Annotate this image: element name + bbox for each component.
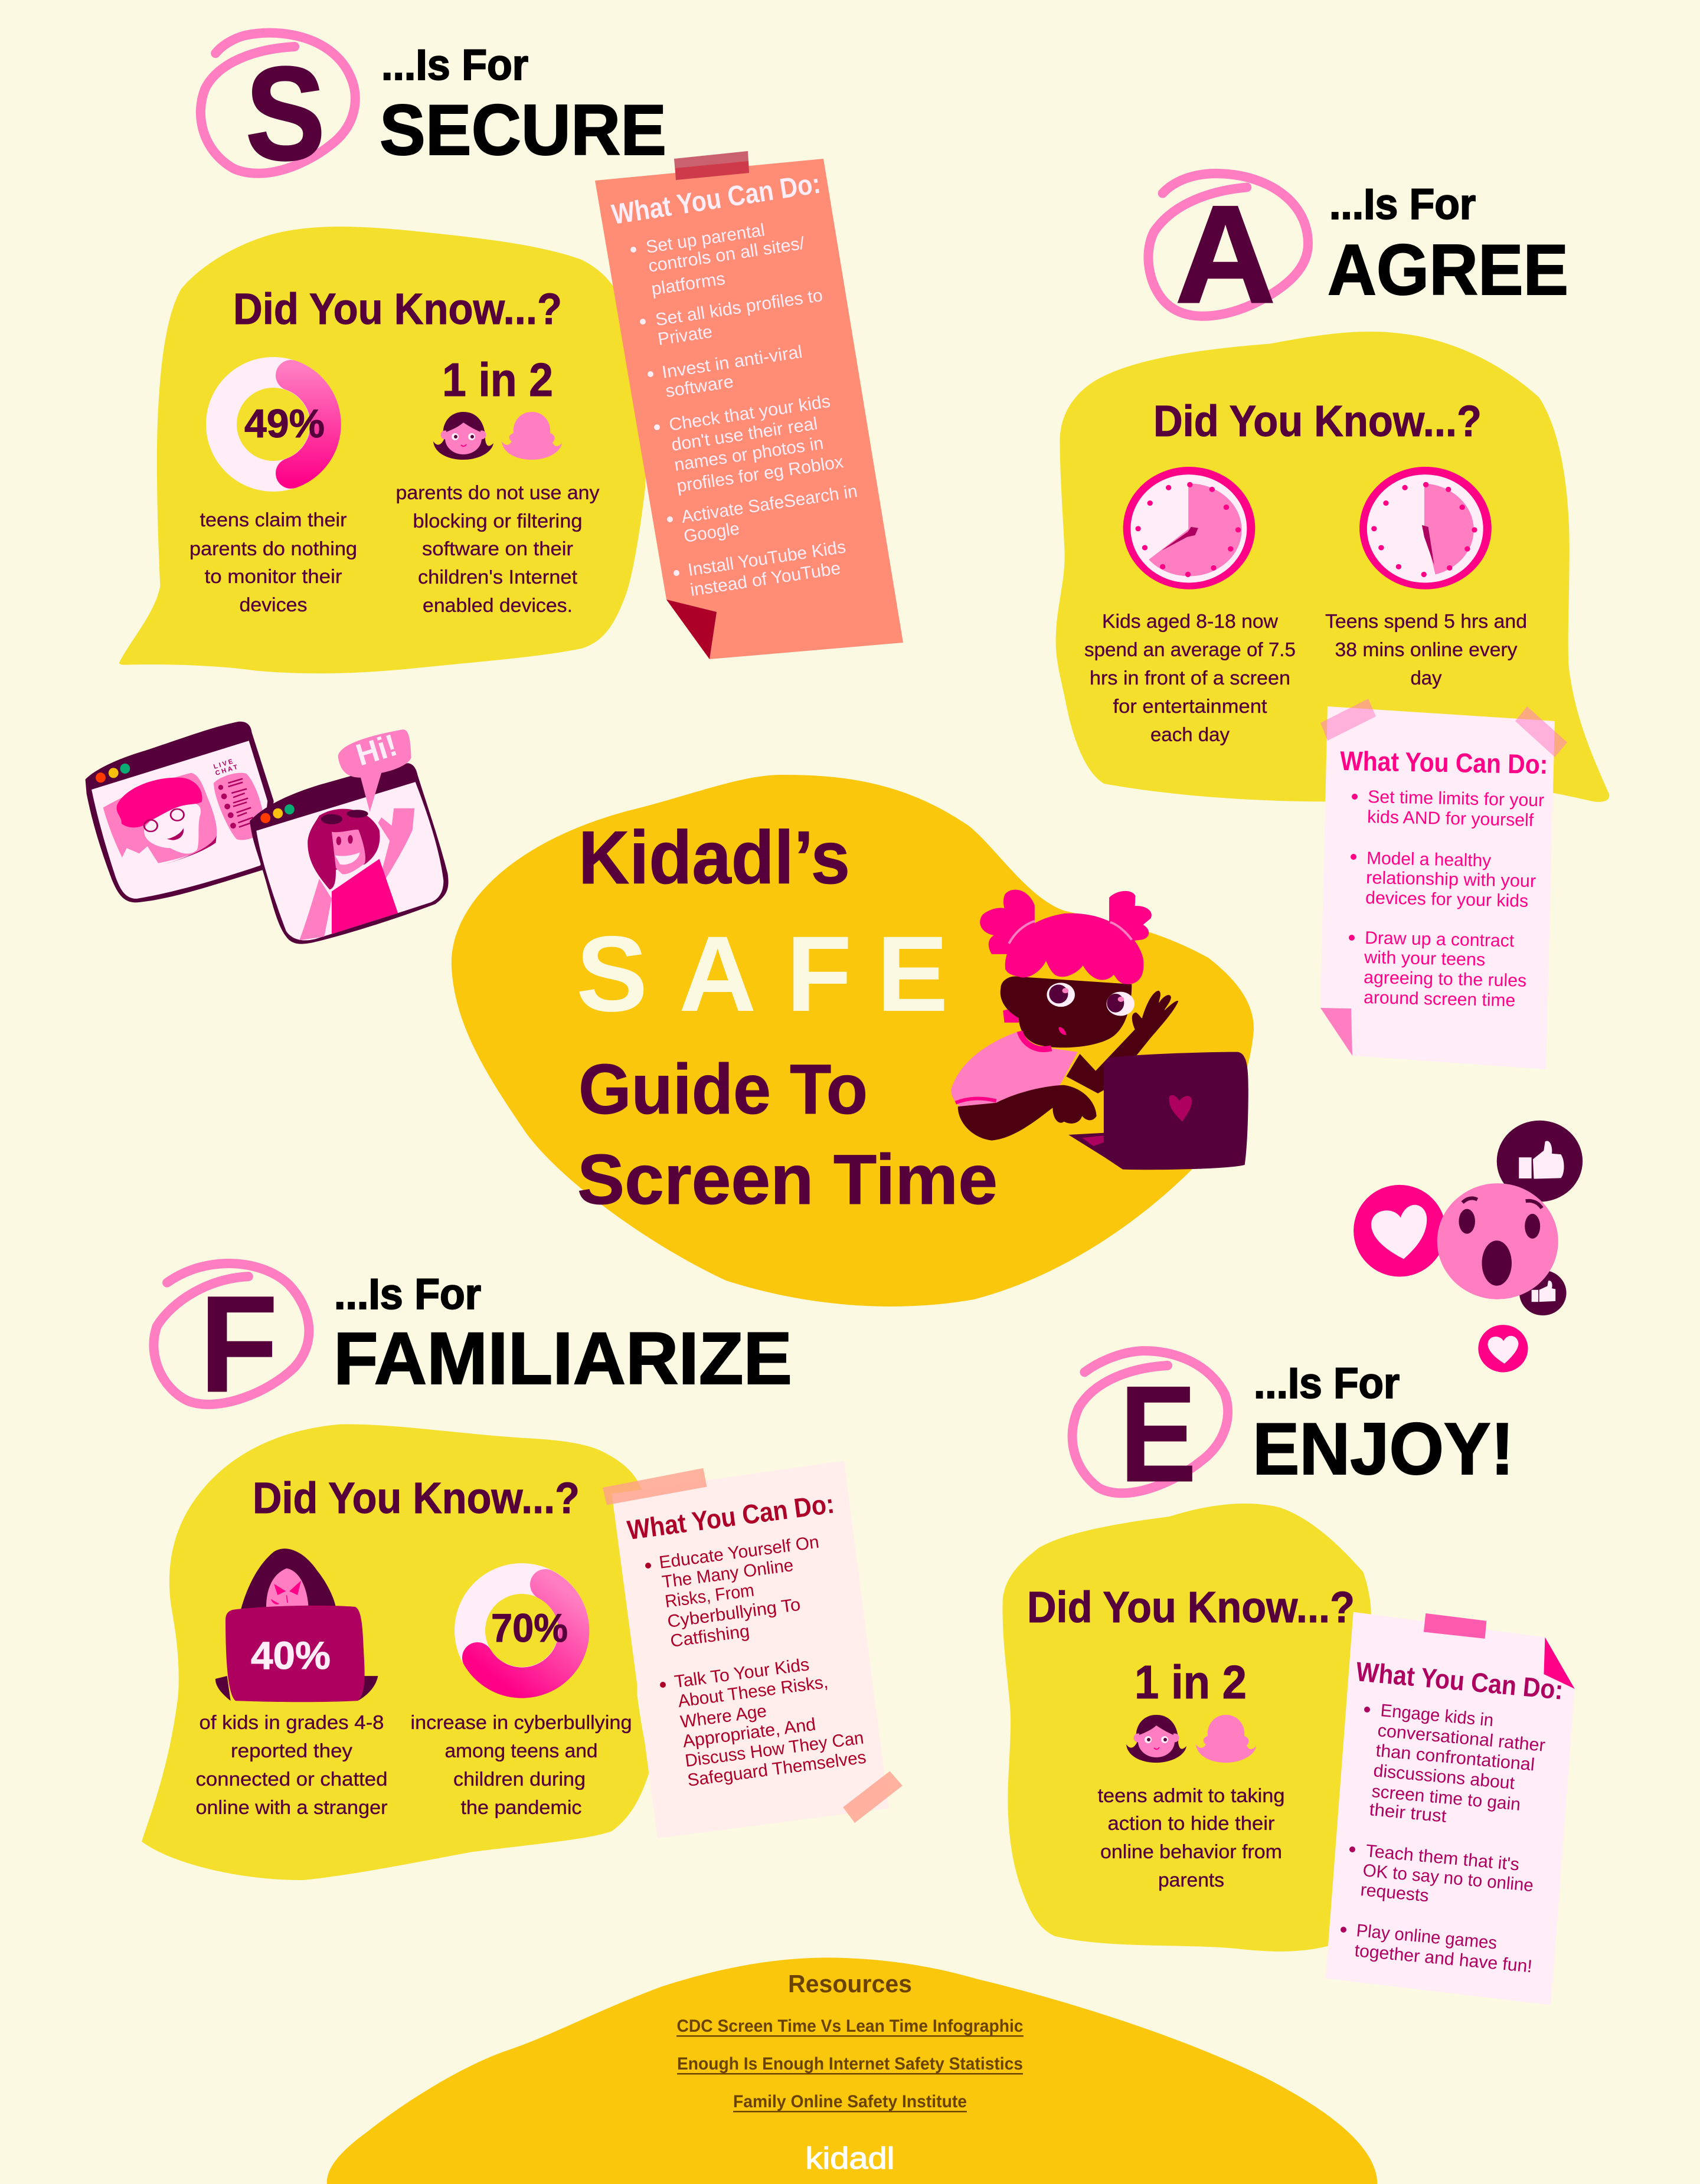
1 in 2 description: blocking or filtering	[413, 510, 582, 532]
note: what you can do (enjoy): screen time to gain	[1371, 1782, 1521, 1815]
did you know heading: Did You Know...?	[1153, 397, 1482, 446]
F heading large: FAMILIARIZE	[334, 1318, 792, 1400]
title blob with title	[0, 775, 1254, 1307]
note: what you can do (secure): names or photos in	[673, 434, 825, 475]
icon: hooded stranger with laptop	[215, 1548, 378, 1702]
note: what you can do (agree)	[1320, 699, 1567, 1069]
note: what you can do (agree): Set time limits for your	[1368, 787, 1544, 810]
1 in 2 description: software on their	[422, 538, 573, 559]
section: E is for Enjoy	[1002, 1351, 1575, 2005]
note: what you can do (secure): don't use their real	[670, 414, 819, 455]
note: what you can do (agree): agreeing to the rules	[1364, 968, 1526, 991]
clock 2 description: Teens spend 5 hrs and	[1325, 610, 1527, 632]
note: what you can do (secure): controls on all sites/	[647, 234, 806, 276]
icons: two faces	[1126, 1715, 1256, 1763]
note: what you can do (secure): profiles for eg Roblox	[675, 452, 845, 496]
note: what you can do (familiarize): Educate Yourself On	[658, 1533, 820, 1573]
S letter badge	[201, 33, 355, 188]
E letter badge	[1073, 1351, 1228, 1511]
note: what you can do (secure): Set up parental	[645, 220, 766, 257]
note: what you can do (agree): with your teens	[1364, 948, 1485, 970]
1 in 2 stat: 1 in 2	[442, 353, 553, 406]
illustration: reaction icons	[1354, 1121, 1583, 1372]
note: what you can do (enjoy): Teach them that it's	[1365, 1841, 1520, 1875]
F speech bubble	[142, 1424, 649, 1880]
donut chart 49%	[221, 372, 326, 476]
illustration: video chat windows	[86, 722, 449, 944]
49% description: to monitor their	[204, 565, 342, 587]
resource link 1: CDC Screen Time Vs Lean Time Infographic	[676, 2016, 1024, 2036]
E heading small: ...Is For	[1254, 1360, 1400, 1407]
live chat label: LIVE	[212, 758, 236, 771]
note: what you can do (secure): Install YouTube Kids	[686, 537, 847, 580]
note: what you can do (enjoy): discussions about	[1372, 1761, 1516, 1793]
donut chart 49%: 49%	[244, 401, 325, 446]
clock 2 description: 38 mins online every	[1335, 638, 1518, 660]
note: what you can do (familiarize): Talk To Your Kids	[674, 1655, 810, 1692]
note: what you can do (enjoy)	[1326, 1612, 1575, 2005]
note: what you can do (enjoy): their trust	[1368, 1800, 1448, 1826]
A heading small: ...Is For	[1329, 181, 1476, 228]
did you know heading: Did You Know...?	[233, 284, 562, 333]
1 in 2 description	[395, 482, 600, 616]
note: what you can do (familiarize): The Many Online	[661, 1556, 795, 1592]
note: what you can do (secure): Google	[682, 519, 741, 546]
1 in 2 description: action to hide their	[1107, 1812, 1275, 1834]
clock 1 description	[1084, 610, 1296, 745]
note: what you can do (familiarize): What You Can Do:	[626, 1488, 836, 1546]
1 in 2 description: parents do not use any	[395, 482, 600, 503]
title line: SAFE: S A F E	[0, 913, 948, 1034]
note: what you can do (familiarize): Risks, From	[664, 1580, 756, 1612]
S heading large: SECURE	[380, 90, 666, 170]
resource link 3: Family Online Safety Institute	[733, 2092, 967, 2111]
panel: resources footer	[327, 1957, 1377, 2184]
49% description	[189, 509, 357, 615]
title line: Kidadl's: Kidadl’s	[578, 816, 850, 899]
70% description: among teens and	[445, 1740, 597, 1761]
did you know heading: Did You Know...?	[1027, 1583, 1355, 1632]
title line: Screen Time: Screen Time	[577, 1140, 998, 1219]
note: what you can do (agree): Draw up a contract	[1365, 928, 1515, 951]
resources heading: Resources	[788, 1970, 912, 1998]
note: what you can do (agree): kids AND for yourself	[1367, 807, 1534, 830]
note: what you can do (secure): software	[664, 372, 735, 401]
note: what you can do (enjoy): Play online games	[1355, 1921, 1498, 1953]
live chat label second line: CHAT	[214, 763, 240, 777]
section: A is for Agree	[1056, 173, 1609, 1069]
70% description: the pandemic	[460, 1796, 582, 1818]
icons: two faces	[433, 412, 562, 460]
note: what you can do (agree): relationship with your	[1366, 868, 1536, 891]
donut chart 70%	[470, 1579, 574, 1683]
note: what you can do (secure): Check that your kids	[668, 391, 832, 435]
note: what you can do (agree): Model a healthy	[1366, 849, 1491, 870]
note: what you can do (secure): Activate SafeSearch in	[680, 482, 859, 527]
clock 5 hours 38 minutes	[1359, 467, 1492, 590]
donut chart 70%: 70%	[491, 1606, 568, 1651]
S speech bubble	[119, 227, 646, 673]
did you know heading: Did You Know...?	[253, 1474, 580, 1522]
1 in 2 description: parents	[1158, 1869, 1224, 1891]
note: what you can do (familiarize): Where Age	[679, 1701, 768, 1732]
note: what you can do (enjoy): Engage kids in	[1379, 1701, 1495, 1730]
S letter badge: S	[246, 39, 325, 188]
note: what you can do (agree): devices for your kids	[1365, 888, 1528, 911]
note: what you can do (secure): What You Can Do:	[610, 168, 823, 231]
40% description: of kids in grades 4-8	[200, 1711, 384, 1733]
A heading large: AGREE	[1328, 230, 1568, 310]
clock 1 description: hrs in front of a screen	[1090, 667, 1290, 689]
note: what you can do (familiarize): Catfishing	[669, 1622, 751, 1651]
section: S is for Secure	[119, 33, 903, 673]
40% description	[196, 1711, 388, 1818]
1 in 2 description: teens admit to taking	[1098, 1784, 1284, 1806]
1 in 2 description	[1098, 1784, 1284, 1891]
S heading small: ...Is For	[381, 41, 528, 89]
note: what you can do (familiarize): Cyberbullying To	[666, 1595, 802, 1632]
F letter badge	[153, 1263, 309, 1421]
speech bubble text: Hi!	[352, 728, 401, 772]
resource link 2: Enough Is Enough Internet Safety Statistics	[677, 2054, 1023, 2074]
icon: hooded stranger with laptop: 40%	[251, 1633, 331, 1677]
70% description	[411, 1711, 632, 1818]
clock 1 description: Kids aged 8-18 now	[1102, 610, 1278, 632]
note: what you can do (enjoy): OK to say no to online	[1362, 1861, 1534, 1895]
note: what you can do (agree): around screen time	[1364, 988, 1515, 1010]
note: what you can do (familiarize): Safeguard Themselves	[686, 1747, 867, 1790]
49% description: parents do nothing	[189, 538, 357, 559]
F heading small: ...Is For	[334, 1271, 481, 1318]
note: what you can do (enjoy): together and have fun!	[1354, 1941, 1533, 1976]
clock 2 description: day	[1411, 667, 1442, 689]
clock 7.5 hours	[1123, 467, 1255, 590]
F letter badge: F	[200, 1268, 278, 1421]
note: what you can do (secure): platforms	[650, 269, 727, 299]
section: F is for Familiarize	[142, 1263, 903, 1880]
clock 2 description	[1325, 610, 1527, 689]
note: what you can do (enjoy): than confrontational	[1375, 1741, 1535, 1774]
note: what you can do (familiarize): Discuss How They Can	[684, 1728, 865, 1771]
clock 1 description: for entertainment	[1113, 695, 1267, 717]
49% description: devices	[240, 594, 307, 615]
note: what you can do (enjoy): requests	[1359, 1880, 1430, 1905]
A letter badge: A	[1175, 176, 1276, 332]
note: what you can do (enjoy): conversational rather	[1377, 1721, 1546, 1756]
note: what you can do (familiarize)	[603, 1461, 903, 1838]
1 in 2 description: enabled devices.	[423, 594, 573, 616]
70% description: increase in cyberbullying	[411, 1711, 632, 1733]
note: what you can do (secure): instead of YouTube	[689, 558, 842, 600]
A speech bubble	[1056, 332, 1609, 802]
70% description: children during	[453, 1768, 586, 1790]
clock 1 description: spend an average of 7.5	[1084, 638, 1296, 660]
note: what you can do (secure): Invest in anti-viral	[661, 342, 803, 382]
clock 1 description: each day	[1150, 723, 1230, 745]
E heading large: ENJOY!	[1253, 1409, 1514, 1490]
title line: Guide To: Guide To	[578, 1050, 868, 1129]
40% description: connected or chatted	[196, 1768, 387, 1790]
note: what you can do (secure)	[595, 151, 903, 659]
1 in 2 description: children's Internet	[418, 566, 577, 588]
note: what you can do (familiarize): Appropriate, And	[682, 1715, 817, 1751]
A letter badge	[1148, 173, 1308, 332]
note: what you can do (agree): What You Can Do:	[1340, 745, 1548, 780]
note: what you can do (secure): Set all kids profiles to	[654, 286, 824, 330]
49% description: teens claim their	[200, 509, 347, 531]
note: what you can do (secure): Private	[656, 322, 714, 349]
logo: kidadl: kidadl	[805, 2142, 895, 2176]
40% description: online with a stranger	[196, 1796, 388, 1818]
1 in 2 stat: 1 in 2	[1135, 1656, 1247, 1708]
40% description: reported they	[231, 1740, 353, 1761]
1 in 2 description: online behavior from	[1100, 1841, 1282, 1862]
note: what you can do (enjoy): What You Can Do:	[1355, 1656, 1564, 1705]
illustration: girl with laptop	[951, 890, 1248, 1170]
note: what you can do (familiarize): About These Risks,	[677, 1672, 829, 1711]
E speech bubble	[1002, 1504, 1371, 1951]
E letter badge: E	[1120, 1358, 1196, 1511]
